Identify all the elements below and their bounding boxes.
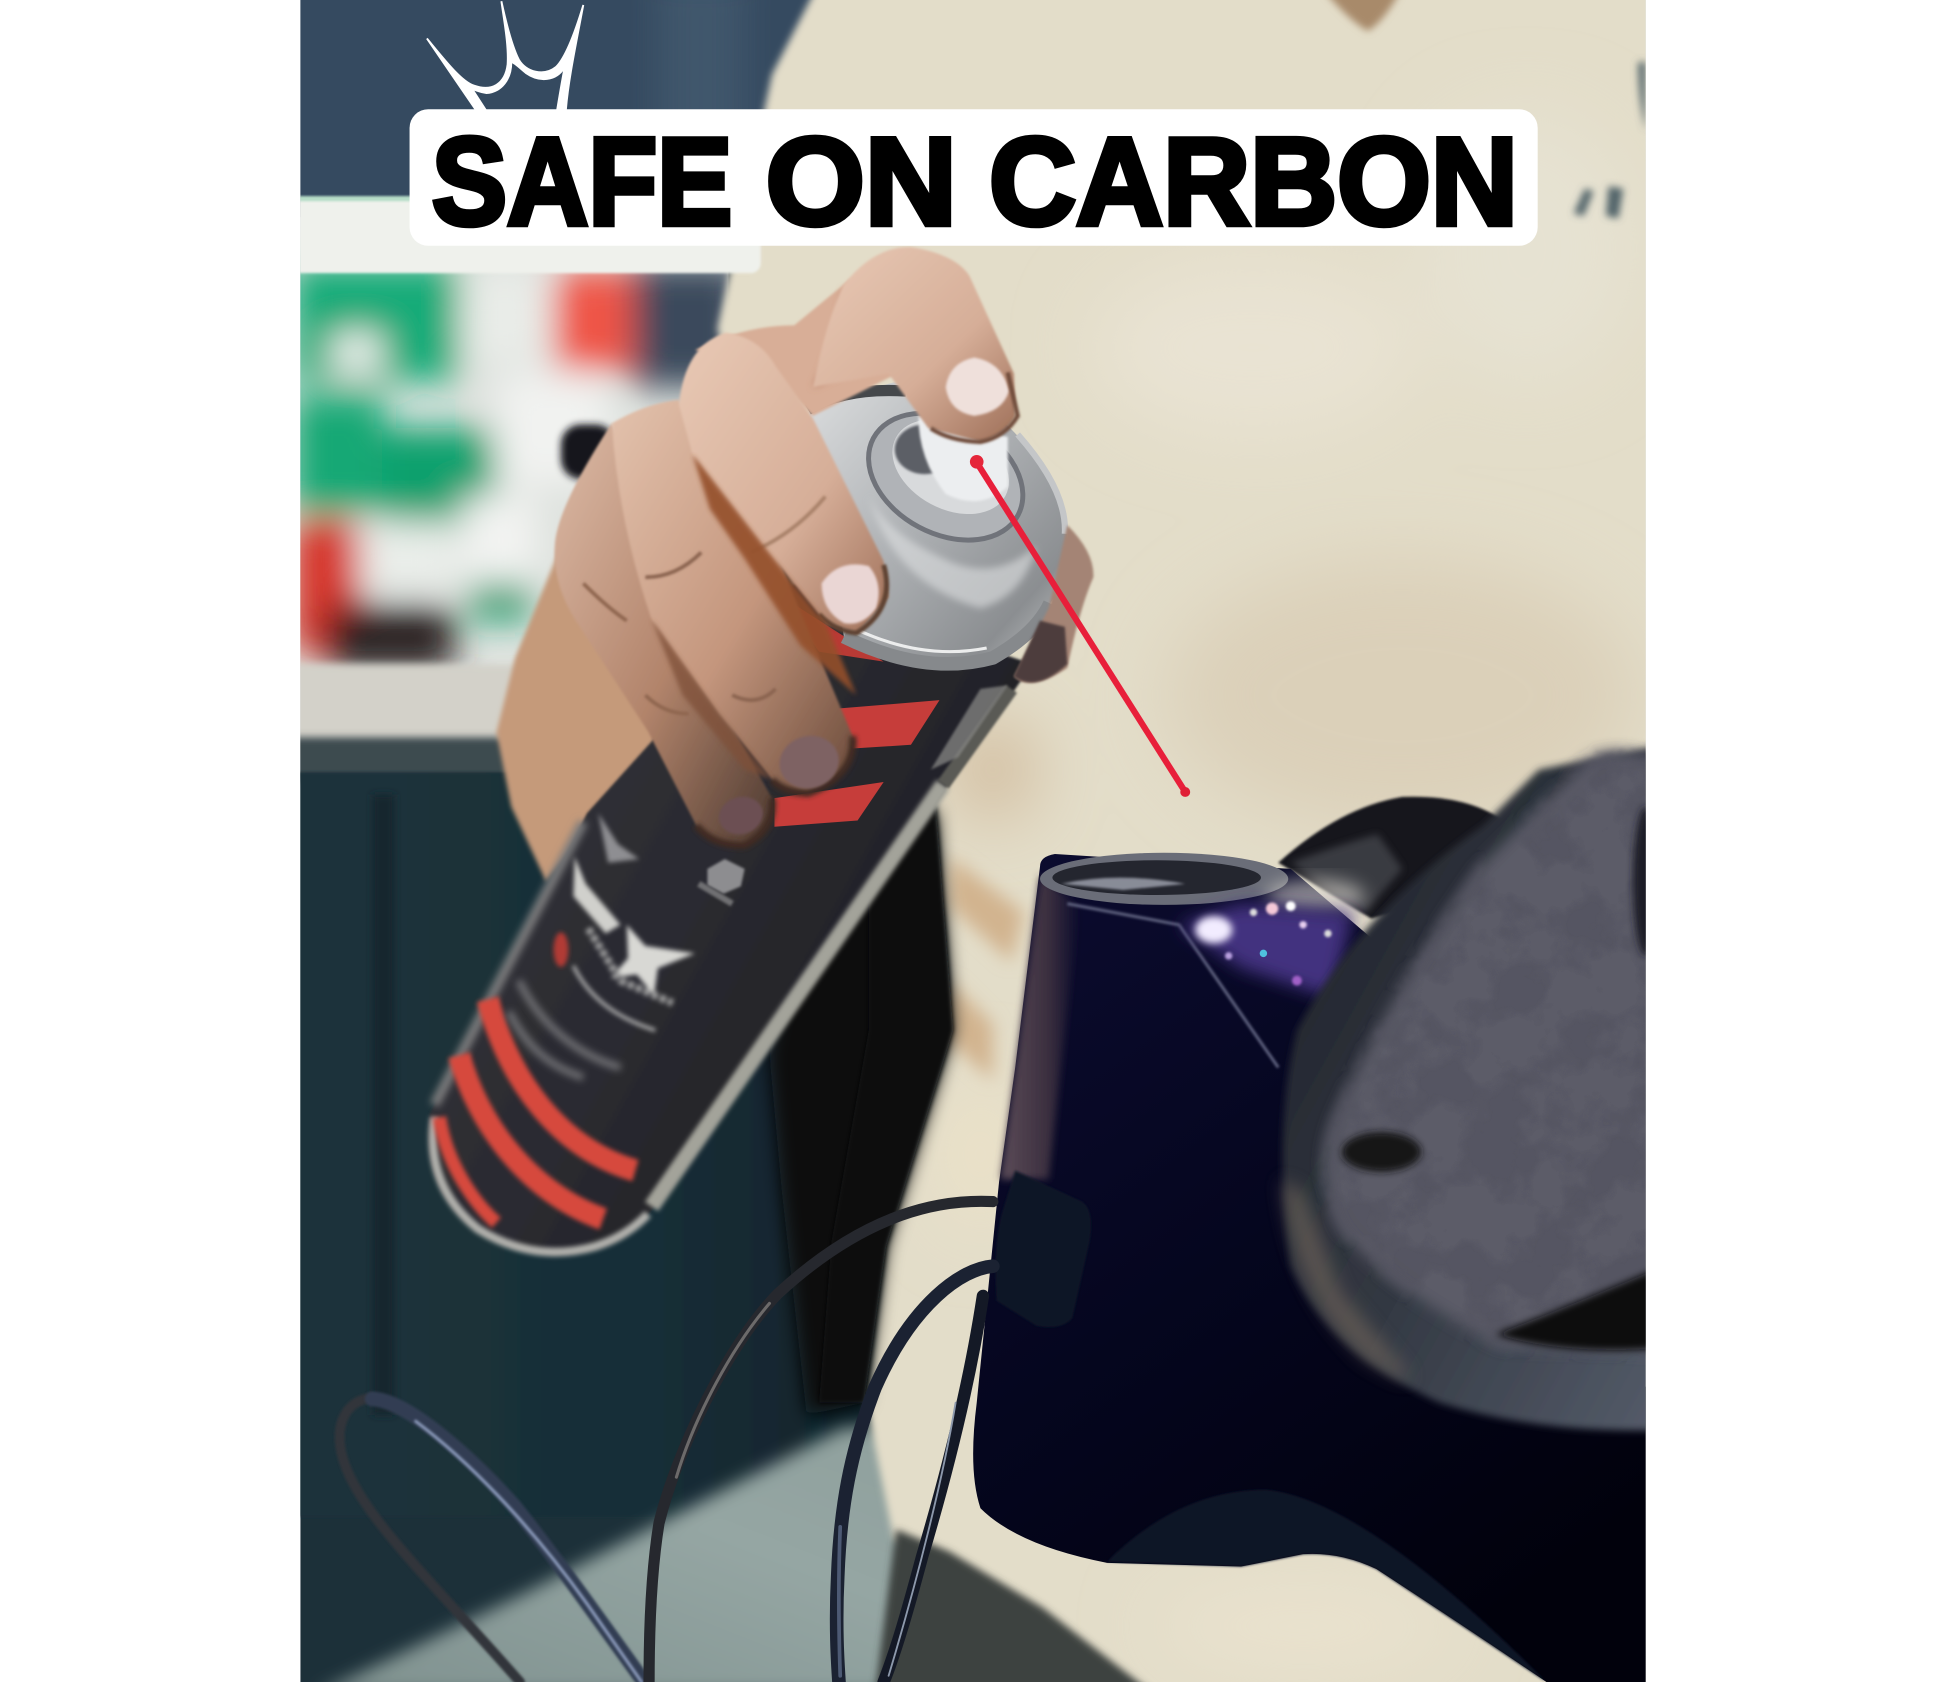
cable four back leg: [340, 1398, 520, 1682]
hand: [555, 247, 1093, 845]
recycle hexagon: [699, 859, 745, 904]
bike lower contour: [1107, 1490, 1546, 1682]
carbon bike part: [973, 853, 1663, 1682]
index finger creases: [751, 497, 825, 552]
middle finger tip grime: [772, 736, 853, 793]
infographic canvas: [300, 0, 1646, 1682]
forearm: [496, 546, 695, 881]
spray mist: [1266, 879, 1365, 914]
spray nozzle: [918, 416, 1008, 501]
background: blurred products: [292, 263, 745, 670]
glove rim: [1283, 745, 1663, 1430]
photo panel: [292, 0, 1663, 1682]
cable two: [837, 1266, 993, 1682]
web of hand: [695, 279, 900, 416]
frame crease: [1067, 904, 1278, 1068]
glove cuff black knit: [1278, 797, 1502, 919]
dome rim: [844, 603, 1050, 664]
title banner: [410, 109, 1538, 252]
purple sparkle reflection: [1179, 901, 1353, 999]
shirt tan folds: [949, 857, 1024, 1080]
index finger: [679, 333, 889, 633]
thumbnail: [946, 358, 1009, 416]
index fingernail: [822, 564, 879, 624]
cable one: [649, 1201, 993, 1682]
back label: [931, 685, 1008, 770]
background: dark object beside hand: [561, 425, 616, 479]
bike left reflection: [1000, 875, 1080, 1179]
can logo: [554, 813, 695, 1030]
shirt logo: [1574, 62, 1646, 218]
background: counter: [292, 664, 536, 782]
towel dark folds: [1342, 807, 1663, 1350]
dome reflection: [869, 497, 1036, 608]
title word: on: ON: [766, 114, 957, 252]
trousers: [875, 1529, 1154, 1682]
background: floor: [322, 1416, 899, 1682]
can highlights: [652, 785, 943, 1207]
shirt: [717, 0, 1663, 1682]
lower can stripes: [439, 999, 635, 1223]
upper can stripes: [774, 593, 939, 827]
background: cabinet: [292, 772, 900, 1517]
towel: [1282, 745, 1663, 1430]
towel fleece: [1325, 753, 1663, 1351]
background: shelf products area: [300, 263, 729, 673]
middle finger: [612, 400, 853, 793]
shirt shading folds: [942, 176, 1629, 836]
brand crown logo: [427, 1, 583, 109]
silver dome: [808, 382, 1067, 670]
aerosol can: [428, 382, 1067, 1254]
cable port: [996, 1171, 1091, 1327]
cables: [340, 1201, 993, 1682]
cable four front leg: [372, 1399, 644, 1682]
title word: carbon: CARBON: [989, 114, 1518, 252]
shadow between fingers: [693, 454, 856, 695]
background: workshop wall: [300, 0, 1646, 1682]
shirt neckline: [1322, 0, 1402, 31]
ring fingernail: [715, 792, 767, 839]
bike top cap: [1040, 853, 1288, 905]
middle fingernail: [774, 729, 845, 795]
shelf band in foreground: [292, 196, 761, 273]
ring finger knuckle: [583, 583, 689, 714]
can text lines: [509, 981, 621, 1077]
can body: [428, 583, 1033, 1254]
red straw: [970, 455, 1190, 797]
rim underside: [1282, 1179, 1410, 1380]
ring finger: [555, 423, 772, 845]
little finger: [1014, 525, 1093, 683]
title word: safe: SAFE: [432, 114, 732, 252]
thumb: [813, 247, 1015, 442]
cable three: [884, 1296, 983, 1682]
middle finger knuckle: [645, 552, 776, 700]
dark sleeve behind can: [769, 807, 953, 1415]
valve collar: [847, 388, 1045, 566]
